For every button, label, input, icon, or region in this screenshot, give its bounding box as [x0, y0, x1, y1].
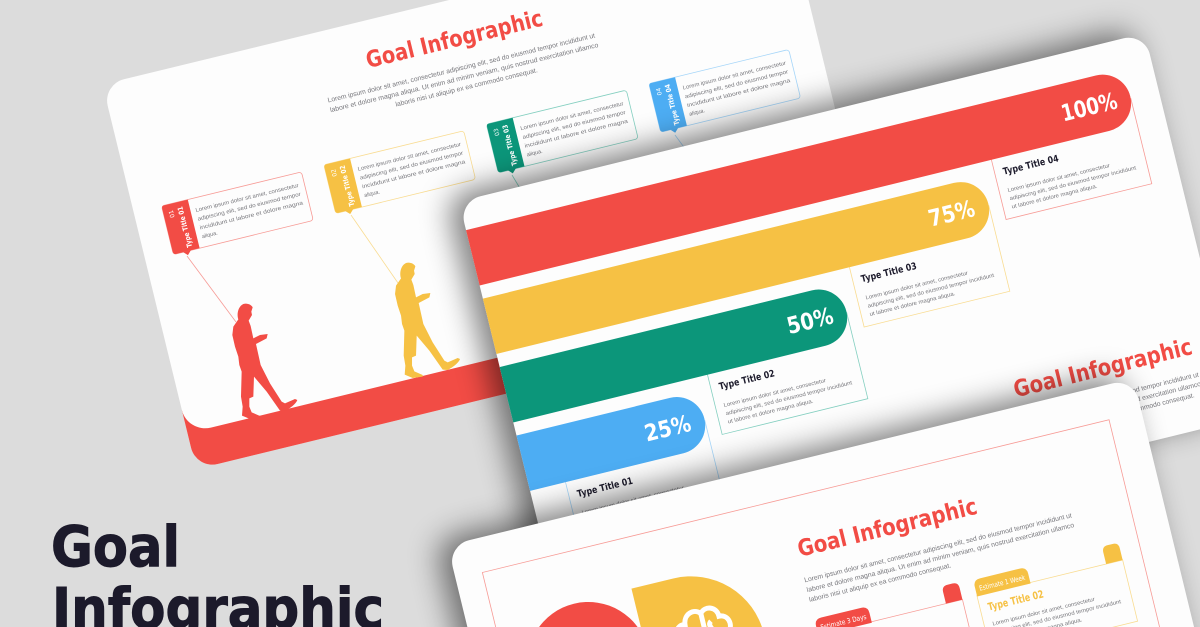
main title: Goal — [51, 515, 180, 580]
callout 03: incididunt ut labore et dolore magna — [524, 118, 630, 150]
slide intro text: laboris nisi ut aliquip ex ea commodo consequat. — [808, 562, 952, 604]
callout 01: aliqua. — [201, 230, 219, 240]
callout 04: Type Title 04 — [664, 83, 681, 126]
callout 02: Lorem ipsum dolor sit amet, consectetur — [357, 142, 462, 173]
callout 02: aliqua. — [364, 189, 381, 199]
slide intro text: Lorem ipsum dolor sit amet, consectetur adipiscing elit, sed do eiusmod tempor incididunt ut — [931, 372, 1200, 444]
panel: walking slide — [98, 0, 887, 474]
callout 01 — [162, 172, 314, 258]
callout 01: adipiscing elit, sed do eiusmod tempor — [197, 192, 302, 223]
slide title: Goal Infographic — [795, 494, 980, 563]
callout 01: Type Title 01 — [176, 206, 194, 248]
box 03 — [843, 205, 1010, 327]
inner frame — [482, 420, 1186, 627]
callout 03: Lorem ipsum dolor sit amet, consectetur — [520, 101, 624, 132]
callout 04 — [649, 49, 802, 136]
box 01: Type Title 01 — [576, 476, 634, 500]
slide intro text: labore et dolore magna aliqua. Ut enim ad minim veniam, quis nostrud exercitation ullamco — [806, 522, 1075, 594]
slide intro text: labore et dolore magna aliqua. Ut enim ad minim veniam, quis nostrud exercitation ullamco — [329, 42, 599, 114]
box 02: adipiscing elit, sed do eiusmod tempor incididunt — [725, 380, 853, 417]
bar 100% — [466, 74, 1132, 286]
box 02: Lorem ipsum dolor sit amet, consectetur — [723, 378, 827, 409]
callout 01: 01 — [168, 209, 177, 218]
box 01: Lorem ipsum dolor sit amet, consectetur — [581, 485, 685, 516]
box 04: adipiscing elit, sed do eiusmod tempor incididunt — [1009, 165, 1137, 202]
callout 02: 02 — [330, 168, 339, 177]
box 04 — [985, 98, 1152, 220]
slide intro text: Lorem ipsum dolor sit amet, consectetur adipiscing elit, sed do eiusmod tempor incididunt ut — [327, 33, 596, 105]
callout 02: adipiscing elit, sed do eiusmod tempor — [359, 151, 464, 182]
box 03: Lorem ipsum dolor sit amet, consectetur — [865, 271, 969, 301]
callout 01: Lorem ipsum dolor sit amet, consectetur — [195, 183, 300, 214]
yellow shape — [631, 561, 787, 627]
callout 04: aliqua. — [689, 108, 706, 118]
box 02: ut labore et dolore magna aliqua. — [727, 399, 815, 425]
bar 25% — [516, 397, 706, 491]
main title — [51, 515, 384, 627]
panel: progress bars slide — [431, 15, 1200, 530]
panel: estimate slide — [434, 371, 1200, 627]
callout 03 — [486, 90, 639, 177]
icon: brain — [673, 604, 732, 627]
slide intro text: laboris nisi ut aliquip ex ea commodo consequat. — [395, 67, 538, 109]
callout 01: incididunt ut labore et dolore magna — [199, 200, 305, 231]
box 04: Type Title 04 — [1002, 153, 1060, 178]
icon: red walking person — [232, 304, 297, 419]
estimate card 02: Lorem ipsum dolor sit amet, consectetur — [992, 597, 1096, 627]
box 04: ut labore et dolore magna aliqua. — [1011, 184, 1099, 211]
callout 04: adipiscing elit, sed do eiusmod tempor — [684, 69, 789, 100]
callout 03: aliqua. — [526, 149, 544, 158]
bar 50% — [500, 290, 848, 422]
ground band — [182, 358, 506, 465]
slide intro text: labore et dolore magna aliqua. Ut enim ad minim veniam, quis nostrud exercitation ullamco — [933, 381, 1200, 453]
bar 75% — [482, 182, 990, 354]
estimate card 02: Type Title 02 — [987, 588, 1045, 614]
slide intro text — [1132, 372, 1200, 410]
slide intro text: laboris nisi ut aliquip ex ea commodo consequat. — [1052, 392, 1195, 434]
red circle — [515, 589, 662, 627]
callout 03: adipiscing elit, sed do eiusmod tempor — [522, 110, 627, 141]
box 01: adipiscing elit, sed do eiusmod tempor incididunt — [583, 488, 711, 525]
box 01: ut labore et dolore magna aliqua. — [585, 506, 673, 533]
box 01 — [565, 420, 720, 515]
icon: yellow walking person — [395, 263, 460, 378]
box 03: adipiscing elit, sed do eiusmod tempor incididunt — [867, 273, 995, 310]
slide intro text: Lorem ipsum dolor sit amet, consectetur adipiscing elit, sed do eiusmod tempor incididunt ut — [804, 512, 1073, 584]
callout 02: incididunt ut labore et dolore magna — [362, 159, 467, 190]
callout 03: 03 — [493, 127, 501, 137]
callout 02 — [324, 131, 477, 217]
box 03: ut labore et dolore magna aliqua. — [869, 291, 957, 318]
callout 04: incididunt ut labore et dolore magna — [687, 78, 792, 109]
bar 100%: 100% — [1059, 89, 1120, 127]
estimate card 02 — [973, 543, 1138, 627]
callout 04: Lorem ipsum dolor sit amet, consectetur — [682, 61, 787, 92]
slide title: Goal Infographic — [363, 6, 545, 74]
callout 04: 04 — [655, 87, 664, 96]
estimate card 01 — [814, 582, 978, 627]
bar 25%: 25% — [642, 411, 694, 447]
callout 03: Type Title 03 — [501, 124, 519, 167]
box 02: Type Title 02 — [718, 368, 776, 393]
box 04: Lorem ipsum dolor sit amet, consectetur — [1007, 163, 1111, 194]
bar 50%: 50% — [784, 303, 836, 340]
box 03: Type Title 03 — [860, 261, 918, 285]
callout 02: Type Title 02 — [339, 164, 356, 207]
connector lines — [187, 135, 686, 322]
estimate card 02: Estimate 1 Week — [978, 574, 1027, 593]
bar 75%: 75% — [926, 196, 978, 233]
box 02 — [701, 312, 868, 434]
